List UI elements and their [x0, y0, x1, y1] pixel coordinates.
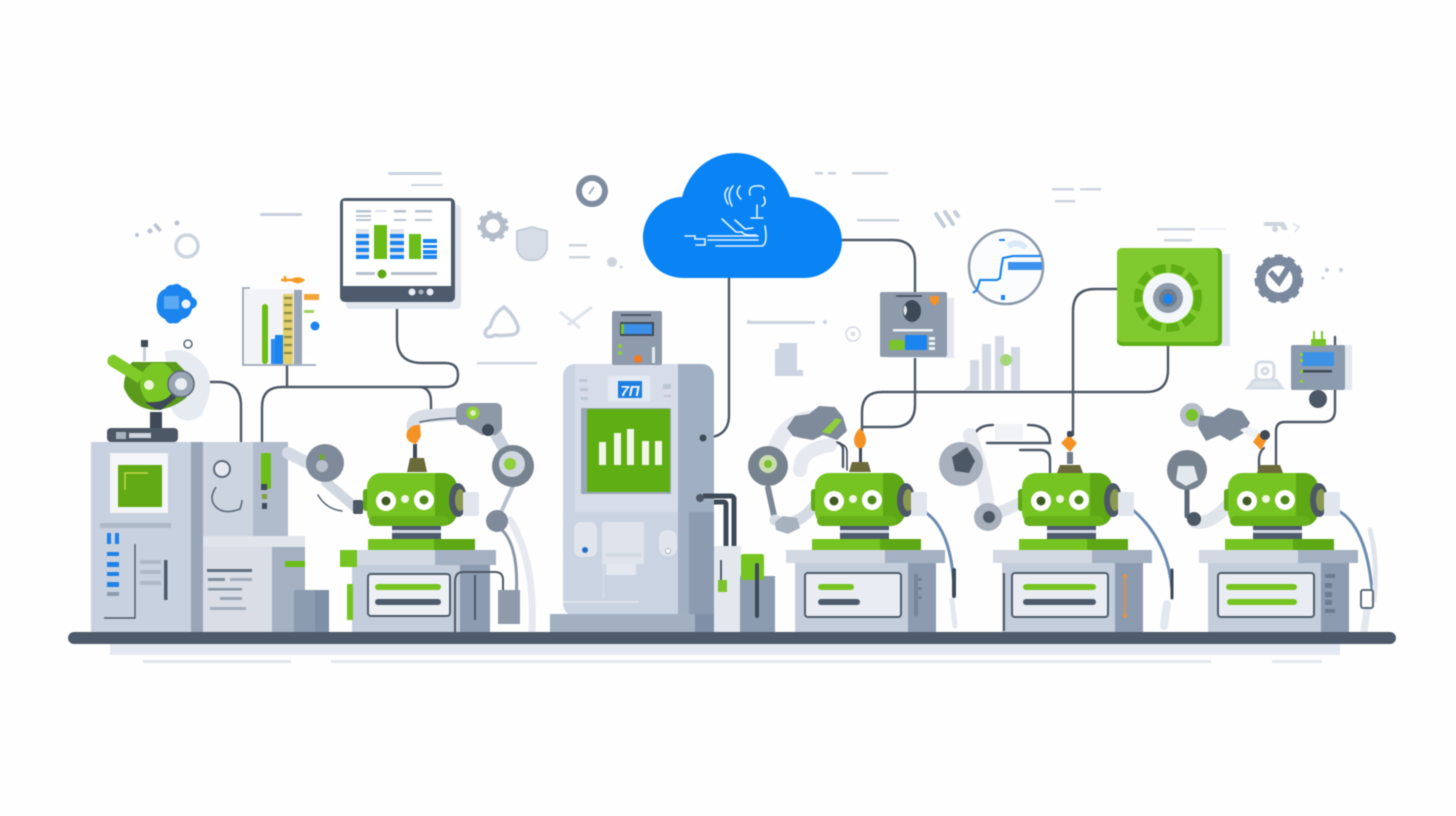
floor shadow under conveyor: [110, 644, 1340, 663]
faded tower: [775, 343, 803, 376]
left machine: [91, 442, 329, 632]
faded dash upper left: [260, 213, 302, 216]
icon: shield faded: [517, 227, 547, 260]
clock map dial: [969, 230, 1043, 304]
digital display: [608, 376, 650, 401]
connecting cables: [193, 240, 1335, 474]
robot 3 joints: [939, 424, 1023, 531]
faded lines top right: [1157, 222, 1299, 242]
machine small labels: [579, 379, 671, 400]
robot station 3: [939, 424, 1172, 632]
grey gear check icon: [1256, 256, 1302, 302]
tablet bar chart: [356, 225, 437, 259]
digital display: 7Π: [620, 383, 641, 400]
tablet dashboard: [340, 198, 461, 309]
machine labels: [100, 523, 171, 585]
robot 4 head and table: [1199, 473, 1358, 632]
gear icon: [1138, 268, 1198, 328]
conveyor belt: [68, 632, 1396, 644]
machine lower text lines: [207, 569, 252, 610]
robot station 1: [288, 403, 534, 632]
tablet slider: [356, 270, 437, 278]
robot 2 arm: [768, 418, 955, 626]
machine gauge and hook: [212, 461, 242, 512]
robot 1 joints: [306, 403, 534, 624]
decorative background icons: [135, 172, 1343, 390]
faded lines near gauge: [569, 244, 622, 268]
tablet buttons: [408, 288, 434, 296]
robot 1 arm: [288, 413, 532, 630]
faded dots left: [135, 220, 180, 237]
robot 4 joints: [1167, 403, 1373, 608]
robot 2 head and table: [786, 473, 945, 632]
tablet header lines: [356, 210, 432, 221]
faded dashes near cloud: [747, 172, 899, 324]
robot 1 tool: [406, 425, 427, 472]
robot station 2: [748, 406, 955, 632]
side box: [714, 546, 775, 632]
robot 3 tool: [1057, 431, 1083, 473]
robot 4 arm: [1187, 486, 1375, 632]
icon: faded ring left: [176, 235, 198, 257]
robot 3 arm: [970, 435, 1172, 626]
lower panels: [563, 522, 677, 603]
central machine: [550, 311, 775, 632]
green bar chart screen: [581, 408, 671, 494]
faded dashes upper tablet: [388, 172, 443, 186]
icon: blue puzzle badge: [156, 284, 197, 324]
faded scissors: [560, 307, 592, 328]
small control unit: [1291, 331, 1352, 408]
machine green screen: [110, 453, 168, 513]
robot 4 tool: [1253, 430, 1283, 473]
top control box: [612, 311, 662, 365]
green device on top of machine: [107, 340, 210, 442]
robot station 4: [1167, 403, 1375, 632]
icon: faded hand: [485, 307, 518, 337]
robot 2 joints: [748, 406, 847, 534]
data panel box: [880, 292, 954, 358]
machine green slot: [261, 453, 271, 509]
icon: cloud line glyph: [685, 186, 766, 246]
faded line: [477, 362, 537, 364]
faded bars with green leaf: [964, 336, 1020, 390]
faded target: [846, 327, 860, 341]
floating data chart: [243, 276, 320, 365]
faded lamp: [1248, 362, 1282, 388]
diagonal strokes: [936, 212, 958, 226]
robot 2 tool: [849, 428, 871, 472]
robot 3 head and table: [993, 473, 1152, 632]
icon: gauge gear: [579, 178, 605, 204]
robot 1 platform: [368, 539, 475, 550]
robot 1 head: [363, 473, 479, 539]
faded dashes above clock: [1052, 188, 1101, 202]
green gear panel: [1117, 248, 1230, 346]
robot 1 table: [340, 550, 503, 632]
machine blue indicators: [107, 533, 119, 596]
cable port and pipes: [696, 434, 734, 546]
cloud: [643, 153, 842, 278]
dots right: [1322, 268, 1343, 280]
icon: gear outline faded: [479, 212, 507, 240]
